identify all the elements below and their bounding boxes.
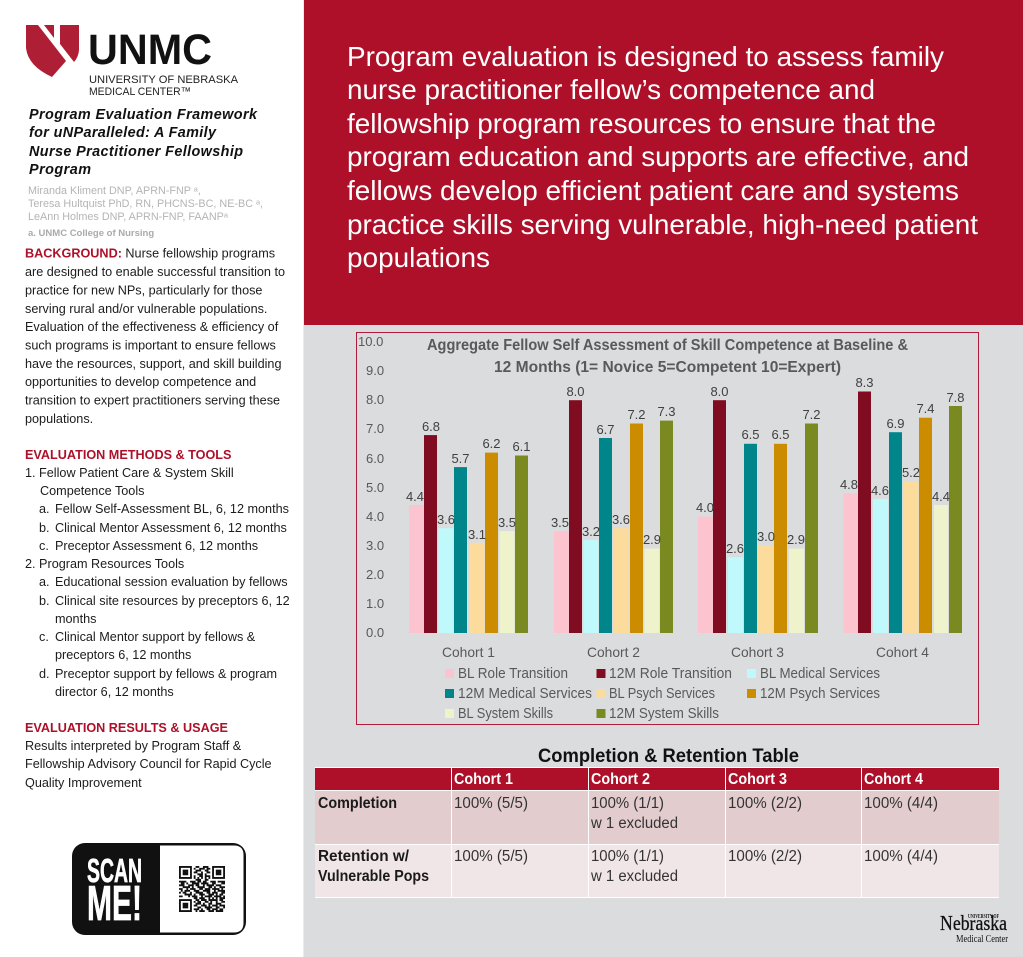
bars: cohort 1: 3.5	[498, 515, 516, 530]
text block: evaluation methods and tools: Competence Tools	[40, 484, 144, 498]
bars: cohort 4	[840, 375, 965, 633]
bars: cohort 2: 8.0	[566, 384, 585, 399]
bars: cohort 2: 7.2	[627, 407, 646, 422]
text block: evaluation results and usage	[25, 721, 272, 790]
logo: University of Nebraska Medical Center	[940, 911, 1009, 945]
bars: cohort 3: 8.0	[710, 384, 729, 399]
bars: cohort 3: 7.2	[802, 407, 821, 422]
icon: UNMC shield	[26, 25, 79, 77]
text block: background: transition to expert practitioners serving these	[25, 394, 280, 408]
title: Program Evaluation Framework	[29, 107, 258, 123]
table row: retention: Retention w/	[318, 848, 410, 865]
x axis labels	[442, 644, 929, 660]
text block: background: serving rural and/or vulnerable populations.	[25, 302, 267, 316]
chart legend: BL Psych Services	[609, 686, 715, 702]
bars: cohort 4: 7.4	[916, 401, 935, 416]
table row: completion: w 1 excluded	[590, 815, 678, 832]
authors: Miranda Kliment DNP, APRN-FNP ᵃ,	[28, 185, 201, 197]
bars: cohort 1: 3.6	[437, 512, 455, 527]
text block: evaluation methods and tools: Clinical Mentor Assessment 6, 12 months	[55, 521, 287, 535]
authors: Teresa Hultquist PhD, RN, PHCNS-BC, NE-BC ᵃ,	[28, 198, 263, 210]
scan me badge: ME!	[87, 877, 142, 931]
y axis labels: 1.0	[366, 596, 384, 611]
y axis labels	[358, 334, 384, 640]
text block: evaluation results and usage: EVALUATION RESULTS & USAGE	[25, 721, 228, 735]
bars: cohort 4: 7.8	[946, 390, 965, 405]
x axis labels: Cohort 2	[587, 644, 640, 660]
logo: UNMC: MEDICAL CENTER™	[89, 86, 191, 98]
text block: evaluation methods and tools: Educational session evaluation by fellows	[55, 575, 288, 589]
title: Program	[29, 162, 91, 178]
table row: retention: 100% (5/5)	[454, 848, 528, 865]
bars: cohort 2: 6.7	[596, 422, 615, 437]
bars: cohort 1: 3.1	[468, 527, 486, 542]
y axis labels: 9.0	[366, 363, 384, 378]
chart legend	[445, 666, 880, 722]
text block: evaluation methods and tools: Fellow Self-Assessment BL, 6, 12 months	[55, 502, 289, 516]
bars: cohort 2: 3.5	[551, 515, 569, 530]
table header: Cohort 3	[728, 771, 787, 788]
table row: completion	[318, 795, 938, 832]
y axis labels: 10.0	[358, 334, 383, 349]
text block: background: opportunities to develop competence and	[25, 375, 256, 389]
table header: Cohort 2	[591, 771, 650, 788]
y axis labels: 2.0	[366, 567, 384, 582]
bars: cohort 1: 6.1	[512, 439, 531, 454]
table header: Cohort 4	[864, 771, 923, 788]
title: Nurse Practitioner Fellowship	[29, 144, 243, 160]
x axis labels: Cohort 3	[731, 644, 784, 660]
bars: cohort 2	[551, 384, 676, 633]
table row: completion: 100% (1/1)	[591, 795, 664, 812]
text block: background: practice for new NPs, particularly for those	[25, 284, 262, 298]
text block: background: populations.	[25, 412, 93, 426]
authors: LeAnn Holmes DNP, APRN-FNP, FAANPᵃ	[28, 211, 229, 223]
bars: cohort 4: 6.9	[886, 416, 905, 431]
logo: UNMC: UNMC	[88, 26, 212, 74]
chart legend: BL Role Transition	[458, 666, 568, 682]
headline statement: nurse practitioner fellow’s competence and	[347, 74, 875, 105]
authors	[28, 185, 263, 239]
panel: bar chart	[356, 332, 978, 724]
y axis labels: 0.0	[366, 625, 384, 640]
bars: cohort 3: 2.6	[726, 541, 744, 556]
logo: University of Nebraska Medical Center: Nebraska	[940, 911, 1008, 935]
panel: completion and retention table	[315, 768, 999, 898]
text block: evaluation methods and tools: Preceptor Assessment 6, 12 months	[55, 539, 258, 553]
text block: evaluation methods and tools: b.	[39, 521, 50, 535]
headline statement	[347, 41, 978, 273]
logo: UNMC: UNIVERSITY OF NEBRASKA	[89, 74, 239, 86]
text block: background: have the resources, support, and skill building	[25, 357, 281, 371]
bars: cohort 4: 5.2	[902, 465, 920, 480]
chart legend: 12M Medical Services	[458, 686, 592, 702]
table row: retention: 100% (4/4)	[864, 848, 938, 865]
headline statement: fellowship program resources to ensure that the	[347, 108, 936, 139]
chart legend: 12M Psych Services	[760, 686, 880, 702]
bars: cohort 3	[696, 384, 821, 633]
text block: evaluation methods and tools: c.	[39, 539, 49, 553]
x axis labels: Cohort 1	[442, 644, 495, 660]
panel: red headline band	[304, 0, 1023, 325]
headline statement: populations	[347, 242, 490, 273]
logo: University of Nebraska Medical Center: Medical Center	[956, 934, 1009, 945]
title: for uNParalleled: A Family	[29, 125, 217, 141]
scan me badge	[72, 843, 246, 935]
table row: retention: 100% (2/2)	[728, 848, 802, 865]
table row: completion: 100% (5/5)	[454, 795, 528, 812]
chart legend: BL Medical Services	[760, 666, 880, 682]
text block: evaluation results and usage: Results interpreted by Program Staff &	[25, 739, 242, 753]
text block: background: BACKGROUND: Nurse fellowship programs	[25, 246, 275, 260]
table row: retention: 100% (1/1)	[591, 848, 664, 865]
bars: cohort 1: 6.2	[482, 436, 501, 451]
text block: background: such programs is important to ensure fellows	[25, 338, 276, 352]
y axis labels: 3.0	[366, 538, 384, 553]
table row: retention: w 1 excluded	[590, 868, 678, 885]
text block: evaluation methods and tools: Clinical site resources by preceptors 6, 12	[55, 594, 290, 608]
panel: left sidebar	[25, 25, 290, 935]
bars: cohort 4: 4.4	[932, 489, 950, 504]
text block: background: Evaluation of the effectiveness & efficiency of	[25, 320, 279, 334]
table row: retention	[318, 848, 938, 885]
text block: evaluation methods and tools: 1. Fellow Patient Care & System Skill	[25, 466, 234, 480]
authors: a. UNMC College of Nursing	[28, 228, 154, 239]
table header: Cohort 1	[454, 771, 513, 788]
chart title: 12 Months (1= Novice 5=Competent 10=Expert)	[494, 359, 841, 376]
text block: evaluation methods and tools: a.	[39, 575, 50, 589]
bars: cohort 3: 3.0	[757, 529, 775, 544]
chart legend: BL System Skills	[458, 706, 553, 722]
text block: evaluation methods and tools: d.	[39, 667, 50, 681]
chart title: Aggregate Fellow Self Assessment of Skill Competence at Baseline &	[427, 337, 908, 354]
text block: evaluation methods and tools: EVALUATION METHODS & TOOLS	[25, 448, 231, 462]
bars: cohort 2: 3.6	[612, 512, 630, 527]
y axis labels: 8.0	[366, 392, 384, 407]
text block: evaluation results and usage: Quality Improvement	[25, 776, 142, 790]
text block: background	[25, 246, 285, 426]
x axis labels: Cohort 4	[876, 644, 929, 660]
text block: evaluation methods and tools: Clinical Mentor support by fellows &	[55, 630, 256, 644]
chart legend: 12M Role Transition	[609, 666, 732, 682]
headline statement: Program evaluation is designed to assess family	[347, 41, 944, 72]
bars: cohort 3: 4.0	[696, 500, 714, 515]
headline statement: practice skills serving vulnerable, high-need patient	[347, 209, 978, 240]
text block: evaluation methods and tools: Preceptor support by fellows & program	[55, 667, 277, 681]
bars: cohort 1: 6.8	[422, 419, 440, 434]
bars: cohort 2: 2.9	[643, 532, 661, 547]
headline statement: program education and supports are effective, and	[347, 141, 969, 172]
text block: evaluation methods and tools: b.	[39, 594, 50, 608]
bars: cohort 1: 5.7	[451, 451, 470, 466]
bars: cohort 4: 8.3	[855, 375, 874, 390]
bars: cohort 1	[406, 419, 531, 633]
icon: QR code	[179, 867, 225, 911]
title	[29, 107, 258, 178]
headline statement: fellows develop efficient patient care and systems	[347, 175, 959, 206]
y axis labels: 4.0	[366, 509, 384, 524]
chart legend: 12M System Skills	[609, 706, 719, 722]
bars: cohort 1: 4.4	[406, 489, 424, 504]
bars: cohort 4: 4.6	[871, 483, 889, 498]
text block: evaluation results and usage: Fellowship Advisory Council for Rapid Cycle	[25, 757, 272, 771]
table row: retention: Vulnerable Pops	[318, 868, 429, 885]
bars: cohort 3: 6.5	[741, 427, 760, 442]
bars: cohort 2: 7.3	[657, 404, 676, 419]
text block: evaluation methods and tools: preceptors 6, 12 months	[55, 648, 191, 662]
logo: University of Nebraska Medical Center: UNIVERSITY OF	[968, 914, 999, 920]
chart title	[427, 337, 908, 376]
table row: completion: 100% (2/2)	[728, 795, 802, 812]
table header	[454, 771, 923, 788]
text block: evaluation methods and tools: months	[55, 612, 96, 626]
table row: completion: 100% (4/4)	[864, 795, 938, 812]
text block: evaluation methods and tools: a.	[39, 502, 50, 516]
text block: evaluation methods and tools	[25, 448, 290, 699]
y axis labels: 5.0	[366, 480, 384, 495]
y axis labels: 6.0	[366, 451, 384, 466]
text block: evaluation methods and tools: c.	[39, 630, 49, 644]
text block: background: are designed to enable successful transition to	[25, 265, 285, 279]
bars: cohort 3: 2.9	[787, 532, 805, 547]
bars: cohort 4: 4.8	[840, 477, 858, 492]
bars: cohort 2: 3.2	[582, 524, 600, 539]
bars: cohort 3: 6.5	[771, 427, 790, 442]
text block: evaluation methods and tools: 2. Program Resources Tools	[25, 557, 184, 571]
text block: evaluation methods and tools: director 6, 12 months	[55, 685, 174, 699]
scan me badge: SCAN	[87, 853, 142, 890]
table title: Completion & Retention Table	[538, 746, 799, 767]
logo: UNMC	[26, 25, 239, 98]
y axis labels: 7.0	[366, 421, 384, 436]
table row: completion: Completion	[318, 795, 397, 812]
